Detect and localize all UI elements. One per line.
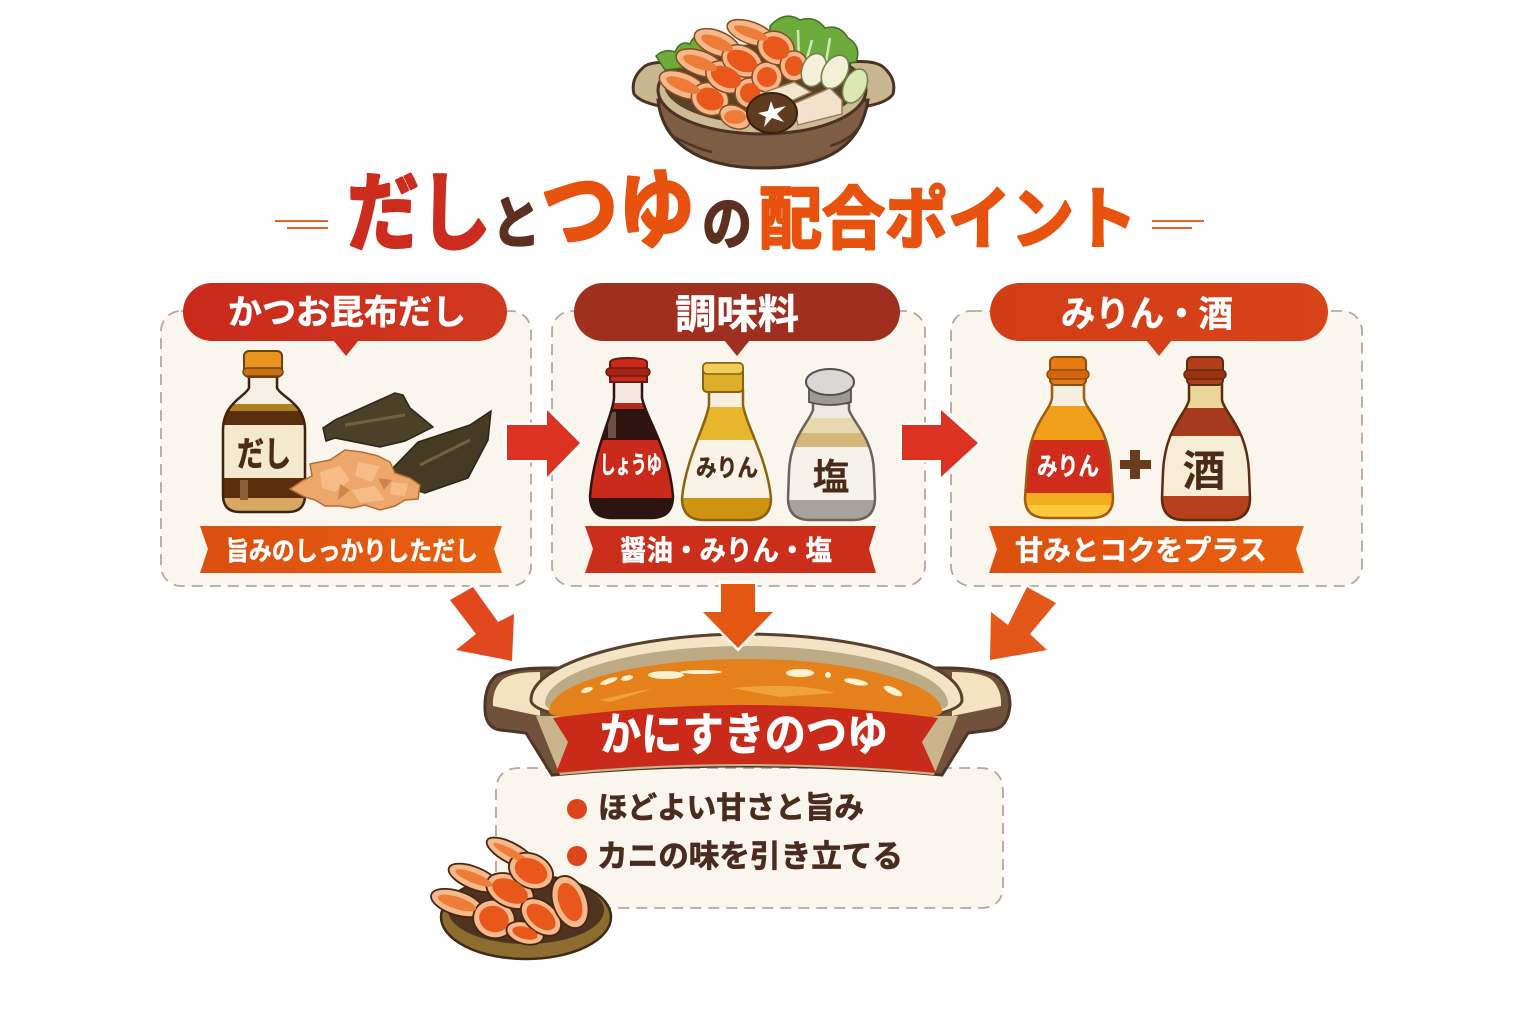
heading pill: katsuo kombu dashi: かつお昆布だし (228, 294, 466, 332)
heading pill: katsuo kombu dashi (183, 283, 507, 356)
title: つゆ (541, 163, 695, 259)
title (347, 163, 1137, 262)
heading pill: seasonings: 調味料 (675, 293, 799, 337)
arrow: mirin to pot (990, 587, 1056, 660)
title: と (492, 192, 540, 255)
heading pill: seasonings (574, 283, 900, 356)
arrow: dashi to pot (450, 587, 514, 661)
title: 配合ポイント (759, 182, 1137, 258)
ribbon: sweetness and richness: 甘みとコクをプラス (1015, 535, 1267, 566)
icon: sake bottle (1160, 357, 1252, 523)
ribbon: sweetness and richness (989, 526, 1304, 573)
ribbon: umami dashi (200, 526, 502, 573)
panel: mirin and sake (951, 283, 1362, 586)
ribbon: umami dashi: 旨みのしっかりしただし (226, 536, 478, 566)
title: だし (347, 166, 491, 262)
pot: kanisuki soup (485, 634, 1010, 775)
title: の (702, 192, 752, 257)
icon: mirin bottle (680, 363, 774, 522)
icon: sake bottle: 酒 (1182, 448, 1226, 496)
icon: mirin bottle orange (1022, 357, 1116, 522)
heading pill: mirin and sake: みりん・酒 (1061, 293, 1233, 334)
icon: plus sign (1120, 450, 1151, 479)
bullet: brings out crab flavour: カニの味を引き立てる (597, 839, 903, 874)
panel: seasonings (552, 283, 925, 586)
icon: bonito flakes (290, 450, 420, 510)
heading pill: mirin and sake (990, 283, 1328, 356)
icon: dashi bottle (220, 351, 310, 516)
icon: mirin bottle: みりん (696, 455, 758, 482)
ribbon: kanisuki no tsuyu: かにすきのつゆ (600, 709, 888, 760)
icon: crab legs on plate (428, 831, 611, 959)
icon: mirin bottle orange: みりん (1037, 453, 1099, 481)
arrow: seasonings to mirin (902, 410, 978, 477)
icon: salt bottle: 塩 (812, 457, 850, 498)
icon: soy sauce bottle (588, 358, 676, 520)
bullet: mild sweetness: ほどよい甘さと旨み (598, 792, 864, 825)
panel: katsuo kombu dashi (161, 283, 531, 586)
icon: crab hot pot (633, 14, 894, 168)
ribbon: kanisuki no tsuyu (553, 705, 938, 773)
ribbon: soy mirin salt (585, 526, 876, 573)
panel: result points (496, 768, 1003, 908)
icon: kombu pieces (323, 393, 491, 493)
icon: salt bottle (785, 369, 877, 523)
ribbon: soy mirin salt: 醤油・みりん・塩 (620, 535, 832, 566)
icon: soy sauce bottle: しょうゆ (600, 452, 662, 479)
arrow: dashi to seasonings (507, 410, 580, 477)
icon: dashi bottle: だし (237, 436, 291, 474)
arrow: seasonings to pot (703, 584, 773, 648)
